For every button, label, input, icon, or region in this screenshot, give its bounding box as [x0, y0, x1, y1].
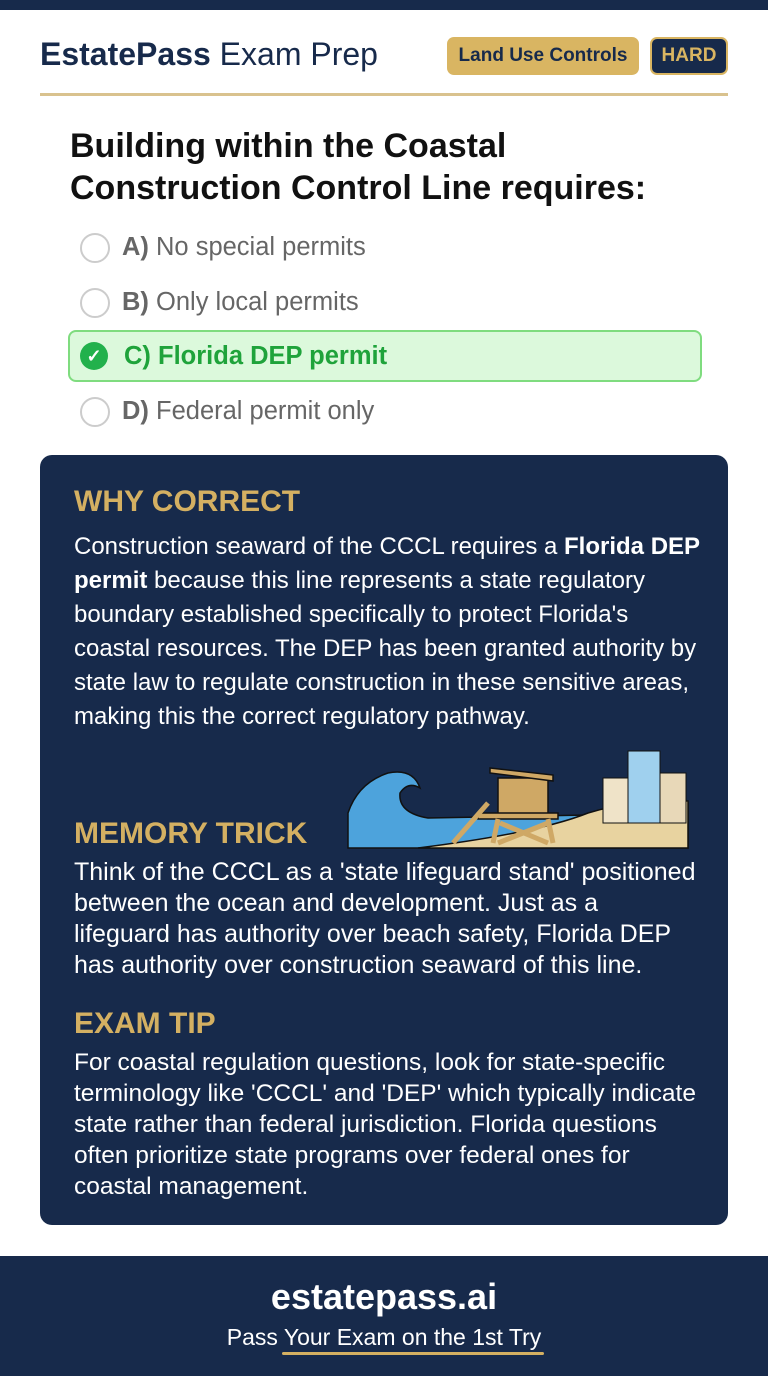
text: why correct	[74, 533, 700, 730]
tag: land use	[447, 37, 639, 75]
text: exam tip	[74, 1049, 696, 1200]
option C correct	[68, 330, 702, 382]
option C correct: ✓	[86, 346, 102, 366]
text: memory trick: has authority over construction seaward of this line.	[74, 951, 642, 979]
text: exam tip: For coastal regulation questions, look for state-specific	[74, 1049, 665, 1076]
tag: hard: HARD	[662, 45, 716, 66]
top bar	[0, 0, 768, 10]
question: Building within the Coastal	[70, 127, 506, 165]
text: why correct: Construction seaward of the CCCL requires a Florida DEP	[74, 533, 700, 560]
footer	[0, 1256, 768, 1376]
option B: B) Only local permits	[122, 288, 359, 316]
tag: land use: Land Use Controls	[459, 45, 627, 66]
text: why correct: state law to regulate construction in these sensitive areas,	[74, 669, 689, 696]
heading: exam tip: EXAM TIP	[74, 1007, 216, 1040]
text: why correct: coastal resources. The DEP has been granted authority by	[74, 635, 696, 662]
header brand: EstatePass Exam Prep	[40, 36, 378, 72]
heading: memory trick: MEMORY TRICK	[74, 817, 307, 850]
footer brand: estatepass.ai	[271, 1276, 497, 1317]
text: exam tip: terminology like 'CCCL' and 'DEP' which typically indicate	[74, 1080, 696, 1107]
panel: explanation	[40, 455, 728, 1225]
text: why correct: permit because this line represents a state regulatory	[74, 567, 645, 594]
text: why correct: boundary established specifically to protect Florida's	[74, 601, 628, 628]
question	[70, 127, 646, 207]
text: memory trick	[74, 858, 695, 979]
text: memory trick: Think of the CCCL as a 'state lifeguard stand' positioned	[74, 858, 695, 886]
option D: D) Federal permit only	[122, 397, 374, 425]
tag: hard	[650, 37, 728, 75]
question: Construction Control Line requires:	[70, 169, 646, 207]
heading: why correct: WHY CORRECT	[74, 485, 300, 518]
option A: A) No special permits	[122, 233, 366, 261]
text: exam tip: state rather than federal jurisdiction. Florida questions	[74, 1111, 657, 1138]
text: exam tip: coastal management.	[74, 1173, 308, 1200]
option C correct: C) Florida DEP permit	[124, 342, 387, 370]
footer tagline: Pass Your Exam on the 1st Try	[227, 1324, 541, 1350]
text: exam tip: often prioritize state programs over federal ones for	[74, 1142, 630, 1169]
illustration: beach scene	[347, 750, 689, 849]
text: why correct: making this the correct regulatory pathway.	[74, 703, 530, 730]
text: memory trick: between the ocean and development. Just as a	[74, 889, 598, 917]
text: memory trick: lifeguard has authority over beach safety, Florida DEP	[74, 920, 671, 948]
